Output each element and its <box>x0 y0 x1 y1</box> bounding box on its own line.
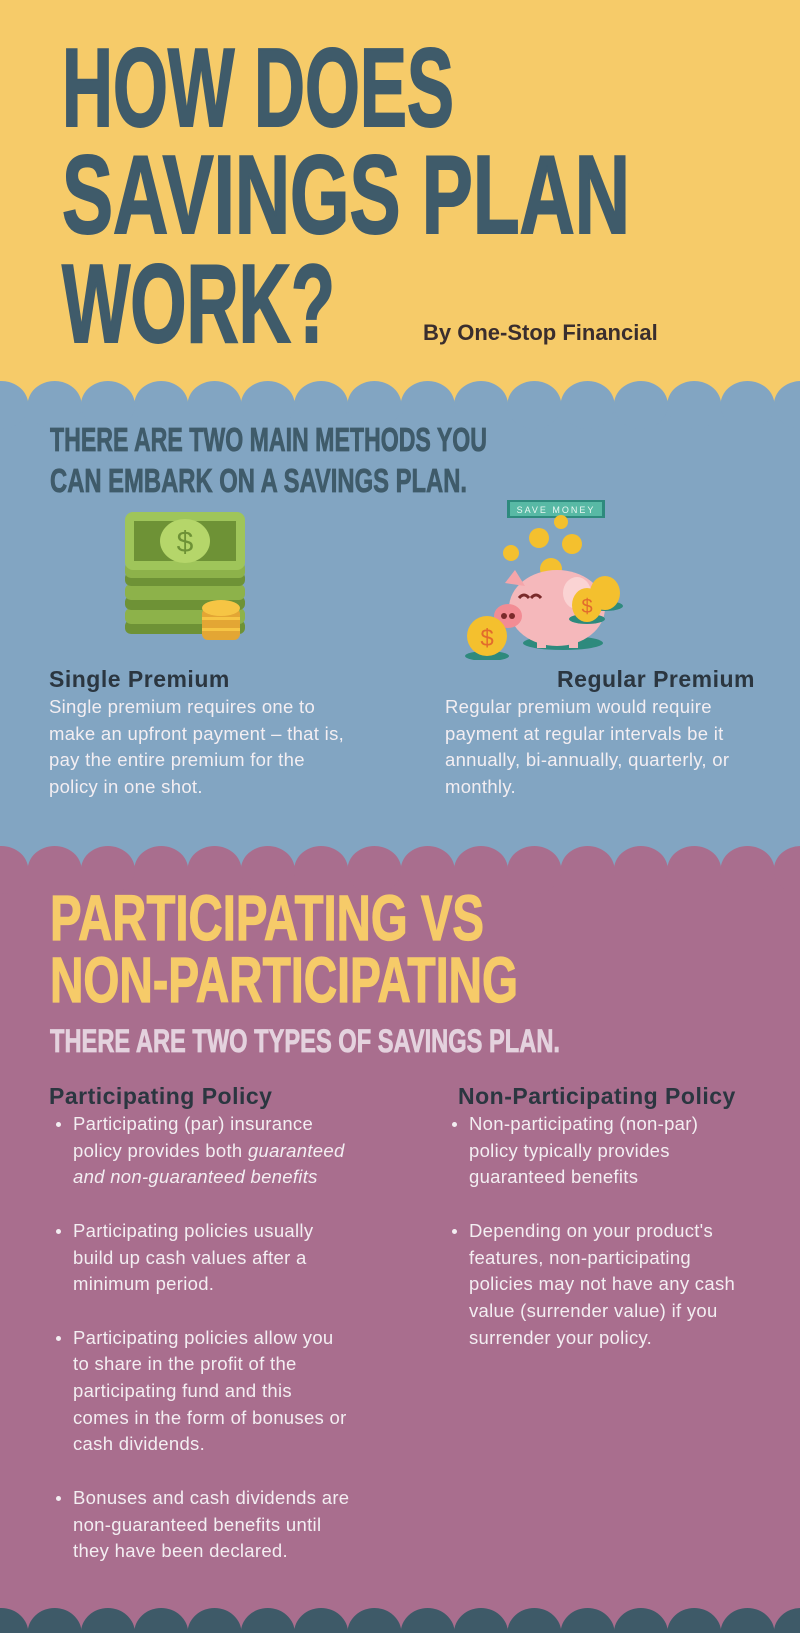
bullet list: participating <box>56 1113 349 1561</box>
text: regular premium: monthly. <box>445 776 516 797</box>
icon: piggy bank: SAVE MONEY <box>517 505 595 515</box>
heading: participating vs non-participating: NON-PARTICIPATING <box>50 944 518 1016</box>
text: regular premium: payment at regular intervals be it <box>445 723 724 744</box>
icon: money stack: $ <box>177 526 194 559</box>
bullet list: participating: comes in the form of bonuses or <box>73 1407 347 1428</box>
byline: By One-Stop Financial <box>423 320 658 345</box>
bullet list: participating: Participating policies allow you <box>73 1327 334 1348</box>
heading: non-participating policy: Non-Participating Policy <box>458 1083 736 1109</box>
title <box>61 26 630 360</box>
icon: piggy bank: $ <box>581 596 593 618</box>
bullet list: non-participating: value (surrender value) if you <box>469 1300 718 1321</box>
bullet list: participating: and non-guaranteed benefits <box>73 1166 318 1187</box>
bullet list: non-participating: Non-participating (non-par) <box>469 1113 698 1134</box>
bullet list: participating: Participating (par) insurance <box>73 1113 313 1134</box>
text: regular premium: annually, bi-annually, quarterly, or <box>445 749 729 770</box>
text: regular premium <box>445 696 729 797</box>
text: single premium: policy in one shot. <box>49 776 203 797</box>
heading: two main methods: CAN EMBARK ON A SAVINGS PLAN. <box>50 462 467 499</box>
bullet list: participating: Bonuses and cash dividends are <box>73 1487 349 1508</box>
bullet list: participating: they have been declared. <box>73 1540 288 1561</box>
bullet list: non-participating: Depending on your product's <box>469 1220 713 1241</box>
heading: regular premium: Regular Premium <box>557 666 755 692</box>
icon: piggy bank <box>465 500 623 660</box>
bullet list: non-participating: guaranteed benefits <box>469 1166 638 1187</box>
heading: single premium: Single Premium <box>49 666 230 692</box>
panel: non-participating policy <box>452 1083 736 1348</box>
bullet list: participating: policy provides both guaranteed <box>73 1140 345 1161</box>
heading: participating vs non-participating <box>50 882 560 1059</box>
bullet list: non-participating <box>452 1113 735 1348</box>
subheading: two types: THERE ARE TWO TYPES OF SAVINGS PLAN. <box>50 1023 560 1059</box>
bullet list: participating: build up cash values after a <box>73 1246 307 1268</box>
heading: two main methods <box>50 421 487 499</box>
title: HOW DOES <box>62 26 454 150</box>
text: regular premium: Regular premium would require <box>445 696 712 717</box>
bullet list: participating: minimum period. <box>73 1273 214 1294</box>
bullet list: participating: participating fund and this <box>73 1380 292 1401</box>
bullet list: non-participating: features, non-participating <box>469 1246 691 1268</box>
bullet list: non-participating: surrender your policy. <box>469 1327 652 1348</box>
heading: two main methods: THERE ARE TWO MAIN METHODS YOU <box>50 421 487 458</box>
bullet list: non-participating: policies may not have any cash <box>469 1273 735 1294</box>
bullet list: participating: cash dividends. <box>73 1433 205 1454</box>
bullet list: participating: to share in the profit of the <box>73 1353 297 1374</box>
panel: regular premium <box>445 666 755 797</box>
panel: single premium <box>49 666 344 797</box>
heading: participating policy: Participating Policy <box>49 1083 272 1109</box>
bullet list: non-participating: policy typically provides <box>469 1140 670 1161</box>
text: single premium: Single premium requires one to <box>49 696 315 717</box>
heading: participating vs non-participating: PARTICIPATING VS <box>50 882 484 954</box>
text: single premium: make an upfront payment – that is, <box>49 723 344 744</box>
panel: participating policy <box>49 1083 349 1561</box>
text: single premium <box>49 696 344 797</box>
bullet list: participating: non-guaranteed benefits until <box>73 1514 321 1534</box>
icon: piggy bank: $ <box>480 625 494 652</box>
bullet list: participating: Participating policies usually <box>73 1220 313 1241</box>
icon: money stack <box>125 512 245 640</box>
text: single premium: pay the entire premium for the <box>49 749 305 770</box>
